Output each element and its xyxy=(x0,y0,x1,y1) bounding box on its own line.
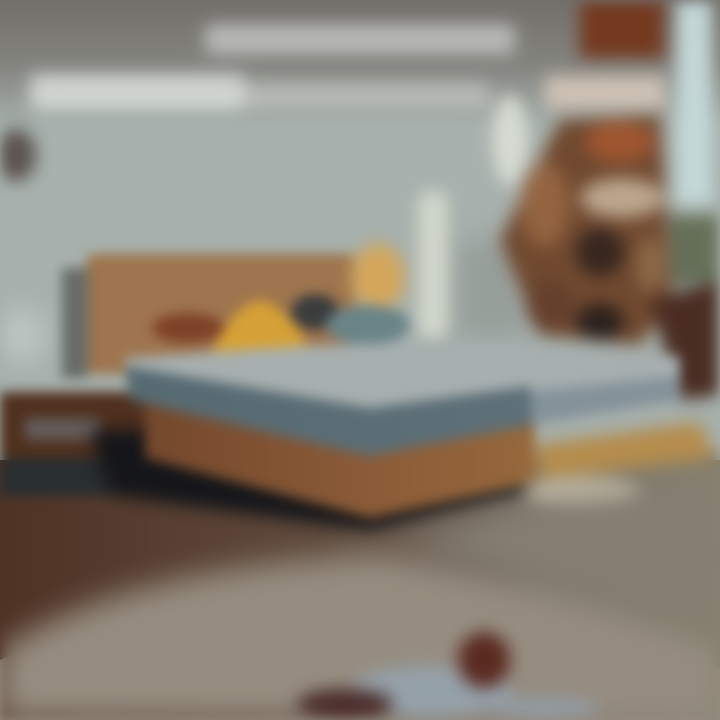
shadow under bed xyxy=(90,430,530,530)
mattress front xyxy=(125,366,532,456)
headboard xyxy=(62,254,356,378)
pillows xyxy=(152,294,410,352)
floor underlay xyxy=(0,460,720,720)
wall highlights xyxy=(0,240,525,361)
bed frame xyxy=(145,395,535,518)
window on right xyxy=(665,0,720,285)
objects on rug xyxy=(297,632,600,719)
sunlit floor patch xyxy=(524,422,715,508)
mattress xyxy=(125,340,680,456)
wall xyxy=(0,0,720,470)
wall art on left xyxy=(0,129,36,181)
bedside table xyxy=(0,392,145,496)
rug right band xyxy=(400,490,720,620)
rug underlay xyxy=(0,600,720,720)
white lamp column xyxy=(418,190,448,340)
wall underlay xyxy=(0,0,720,465)
title text bars (illegible blurred lettering) xyxy=(30,24,515,110)
mattress right side xyxy=(500,350,680,425)
pale light streak xyxy=(492,94,528,186)
mattress top xyxy=(125,340,680,405)
rug xyxy=(0,555,720,720)
brown textured figure on right xyxy=(500,0,720,400)
floor xyxy=(0,450,720,720)
yellow cushion against headboard xyxy=(351,244,405,310)
